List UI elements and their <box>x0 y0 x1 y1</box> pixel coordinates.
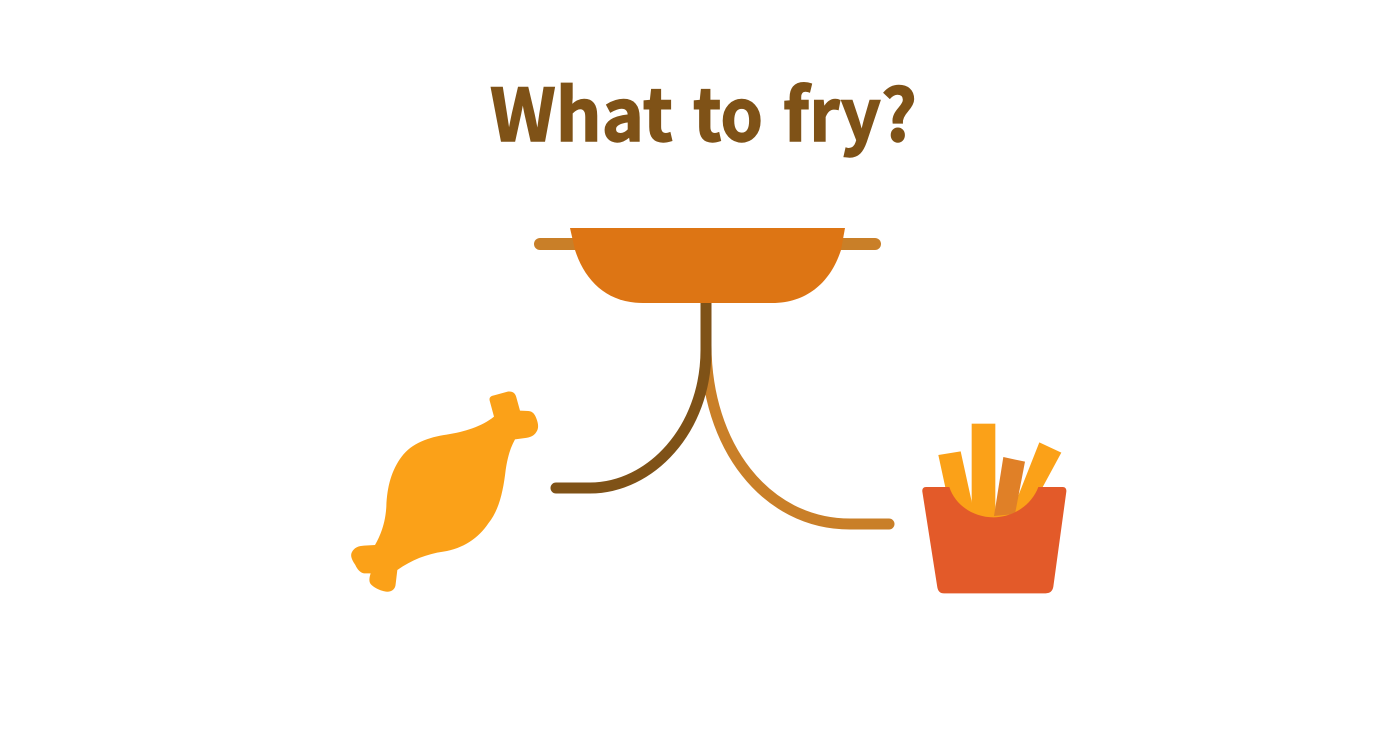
title: What <box>490 57 673 162</box>
fry: tall <box>972 424 995 519</box>
title: fry? <box>783 57 917 162</box>
fill behind the fries <box>949 487 1038 518</box>
pan body <box>570 228 845 303</box>
icon: french fries <box>922 424 1066 593</box>
fry: left <box>938 451 975 517</box>
connector: pan to chicken <box>556 300 706 488</box>
connector: pan to fries <box>706 345 889 524</box>
fries box <box>922 487 1066 593</box>
fry: right <box>1010 442 1061 517</box>
title: to <box>693 57 763 162</box>
fry: short dark <box>994 457 1025 516</box>
icon: chicken drumstick <box>351 392 538 592</box>
icon: frying pan <box>534 228 881 303</box>
title <box>490 57 917 162</box>
pan handles <box>534 238 881 250</box>
